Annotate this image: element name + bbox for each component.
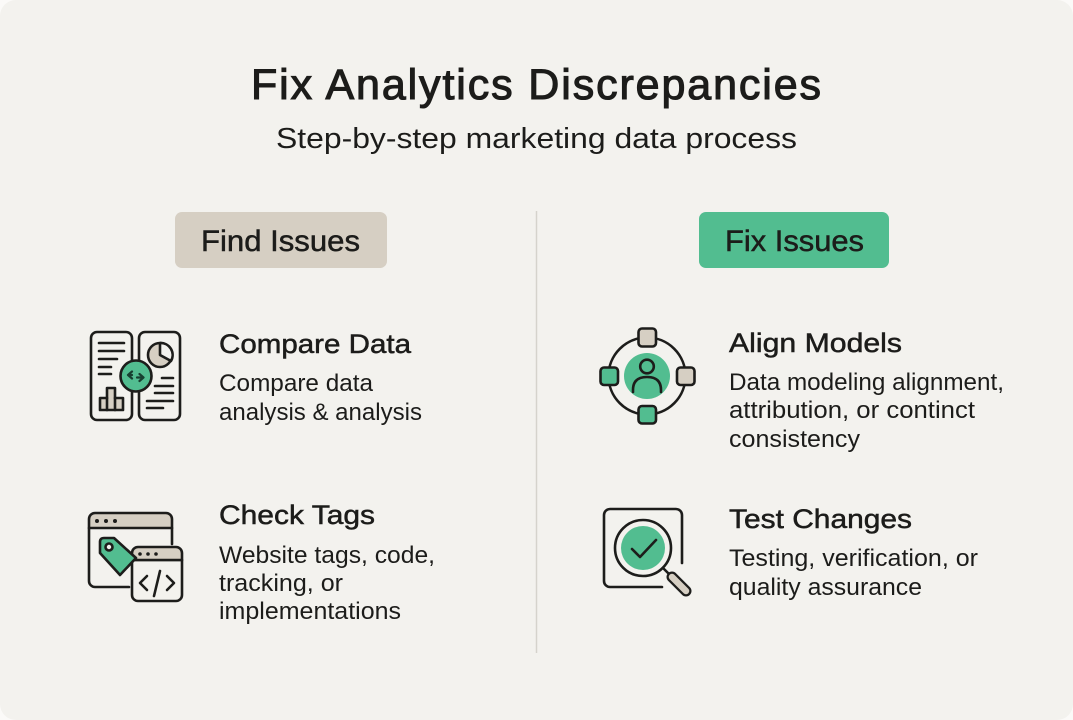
text: compare data: Compare data [219,370,374,397]
text: align models: Data modeling alignment, [729,369,1004,396]
icon: test changes [604,509,686,591]
badge: fix issues: Fix Issues [725,225,864,258]
text: check tags: Website tags, code, [219,542,435,569]
text: test changes [729,504,978,601]
text: align models: attribution, or continct [729,397,975,424]
text: align models [729,328,1004,453]
text: check tags: tracking, or [219,570,343,597]
text: check tags: Check Tags [219,500,375,530]
text: check tags: implementations [219,598,401,625]
badge: find issues [175,212,387,268]
text: test changes: Testing, verification, or [729,545,978,572]
text: test changes: Test Changes [729,504,912,534]
icon: compare data [91,332,180,420]
title: Fix Analytics Discrepancies [251,61,821,109]
icon: check tags [89,513,182,601]
text: compare data: Compare Data [219,329,412,359]
text: align models: Align Models [729,328,902,358]
subtitle: Step-by-step marketing data process [276,123,797,155]
panel: fix issues [600,212,1004,601]
text: align models: consistency [729,426,860,453]
icon: align models [600,328,694,424]
panel: find issues [89,212,435,625]
text: test changes: quality assurance [729,574,922,601]
text: compare data: analysis & analysis [219,399,422,426]
text: compare data [219,329,422,426]
text: check tags [219,500,435,625]
badge: fix issues [699,212,889,268]
badge: find issues: Find Issues [201,225,360,258]
